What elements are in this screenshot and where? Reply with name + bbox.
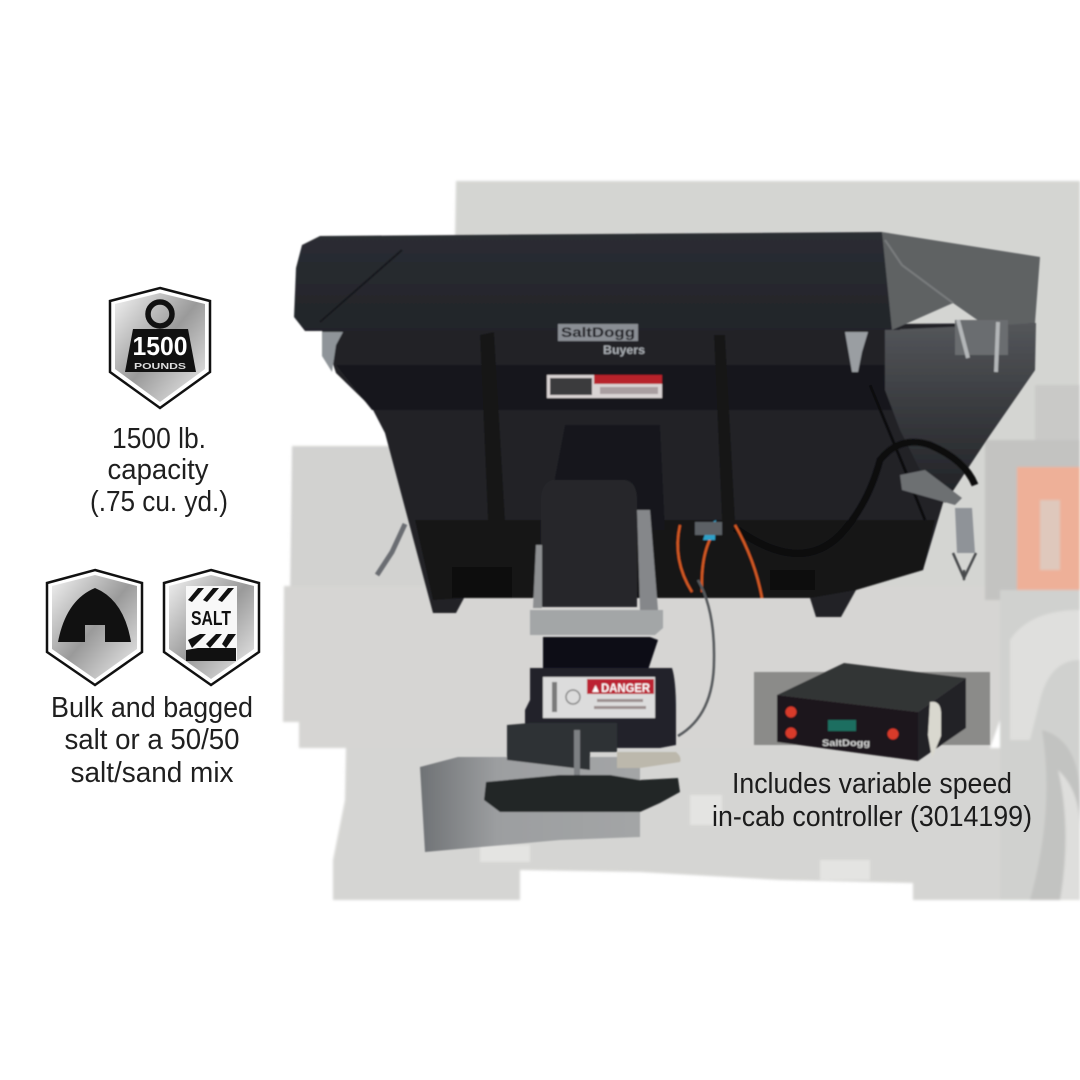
controller front — [777, 695, 918, 761]
bracket pin — [574, 730, 580, 775]
faded truck background — [283, 181, 1080, 900]
chute left rail — [533, 545, 542, 608]
bag label: SALT — [191, 608, 231, 630]
capacity text: (.75 cu. yd.) — [90, 486, 228, 518]
bag stripes top — [188, 588, 234, 602]
bag stripes bottom — [188, 634, 236, 648]
lower chute — [543, 637, 658, 670]
wire connector — [695, 522, 722, 535]
right latch — [845, 332, 868, 372]
capacity text: capacity — [108, 454, 209, 486]
spinner disk — [617, 752, 680, 768]
controller top — [777, 663, 966, 712]
danger decal — [547, 375, 662, 398]
weight ring — [148, 302, 172, 326]
hopper lower band — [415, 520, 935, 600]
controller brand: SaltDogg — [822, 738, 870, 748]
salt bag — [186, 586, 237, 661]
red knobs — [786, 706, 898, 740]
shield face — [52, 575, 137, 679]
spreader product photo — [294, 232, 1040, 852]
side strap hook — [953, 553, 976, 580]
capacity text: 1500 lb. — [112, 423, 206, 455]
materials text: salt or a 50/50 — [64, 724, 240, 756]
spinner fins — [484, 775, 680, 812]
side strap — [955, 508, 975, 553]
tarp lid grey — [882, 232, 1040, 330]
brand label — [558, 324, 645, 357]
materials text: salt/sand mix — [70, 757, 234, 789]
hopper right side panel — [885, 323, 1036, 503]
tarp lid black — [294, 232, 900, 331]
weight unit: POUNDS — [134, 361, 186, 371]
icon: 1500 pounds capacity shield — [110, 288, 210, 408]
sensor cable — [678, 580, 714, 736]
green switch — [828, 720, 856, 731]
hopper shadow band — [336, 365, 900, 410]
blue connector — [703, 520, 716, 540]
hopper body — [321, 323, 1035, 617]
lid grey fold — [885, 240, 953, 303]
lid fold line — [320, 250, 402, 322]
controller caption: in-cab controller (3014199) — [712, 801, 1032, 833]
bag base — [186, 648, 236, 661]
shield face — [169, 575, 254, 679]
hopper ribs — [480, 332, 735, 520]
controller backdrop — [754, 672, 990, 745]
in-cab controller — [754, 663, 990, 761]
salt pile — [58, 588, 131, 642]
weight number: 1500 — [132, 331, 188, 361]
icon: bagged salt shield — [164, 570, 259, 685]
second hose — [870, 385, 925, 520]
motor housing — [525, 668, 676, 748]
orange wires — [678, 525, 762, 598]
side latches — [955, 320, 1008, 355]
icon: bulk pile shield — [47, 570, 142, 685]
vent slots — [452, 567, 815, 598]
metal frame — [530, 610, 663, 635]
controller caption — [712, 768, 1032, 833]
controller side — [918, 678, 966, 761]
materials text — [51, 692, 253, 789]
hose fitting — [900, 470, 962, 505]
chute neck — [545, 425, 665, 530]
motor danger decal — [543, 677, 655, 718]
left strap — [322, 332, 343, 372]
chute side rail — [637, 510, 658, 610]
side latch hardware — [958, 320, 998, 372]
hose mass — [735, 442, 975, 553]
controller caption: Includes variable speed — [732, 768, 1012, 800]
capacity text — [90, 423, 228, 518]
weight body — [125, 329, 196, 372]
motor danger decal: ▲DANGER — [590, 681, 650, 695]
materials text: Bulk and bagged — [51, 692, 253, 724]
brand label: SaltDogg — [561, 324, 635, 340]
deflector plate — [420, 757, 640, 852]
mount bracket — [507, 723, 617, 770]
lower left strap — [377, 524, 405, 575]
end clip — [928, 702, 941, 758]
chute panel — [541, 480, 637, 607]
brand label: Buyers — [603, 343, 645, 357]
shield face — [115, 293, 205, 402]
